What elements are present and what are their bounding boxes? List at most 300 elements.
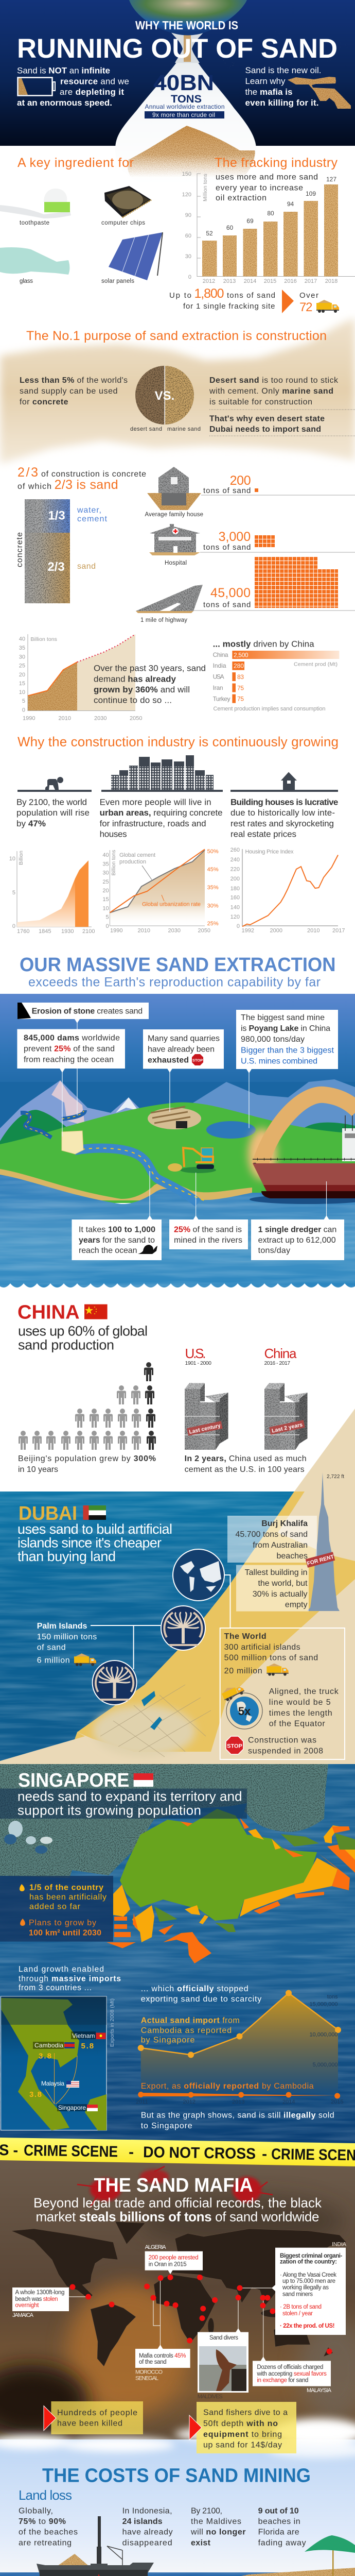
- line chart: cement and urbanization: 45%: [207, 867, 219, 873]
- text block: cement: cement as the U.S. in 100 years: [185, 1465, 305, 1474]
- panel: Singapore: [0, 1764, 355, 2145]
- map inset: sand exporters: 3.8: [29, 2090, 42, 2099]
- line chart: cement and urbanization: 5: [105, 914, 109, 921]
- text block: depleting: at an enormous speed.: [17, 98, 112, 108]
- illustration: dredging cross-section: [0, 2516, 355, 2576]
- illustration: excavator: [168, 1148, 216, 1173]
- area chart: world population: 0: [12, 923, 15, 929]
- bar chart: fracking sand: 2015: [264, 278, 276, 284]
- text block: artificial islands: islands since it's cheaper: [17, 1535, 162, 1551]
- area chart: sand demand: 40: [19, 636, 25, 642]
- callout: The World: 20 million: [224, 1667, 262, 1675]
- icon: sand comparison: desert sand: [130, 426, 162, 432]
- text block: urban areas: [100, 798, 223, 839]
- heading: [5, 1296, 108, 1327]
- icon: US cement blocks: [185, 1383, 228, 1450]
- line chart: housing price index: 160: [230, 894, 240, 901]
- callout: quarries: [143, 1029, 224, 1073]
- bar chart: fracking sand: 2016: [284, 278, 297, 284]
- callout: dams: prevent 25% of the sand: [24, 1044, 115, 1053]
- panel: sand mafia: [0, 2138, 355, 2447]
- text block: beaches: [19, 2507, 78, 2547]
- area chart: sand demand: 30: [19, 654, 25, 660]
- text block: beaches: of the beaches: [19, 2528, 78, 2537]
- chart: concrete composition: cement: [77, 515, 108, 523]
- label: solar panels: [101, 278, 134, 284]
- bar chart: fracking sand: 0: [188, 274, 191, 280]
- callout: Jamaica: [12, 2287, 69, 2318]
- area chart: sand imports: by Singapore: [141, 2036, 194, 2045]
- callout: officials: Dozens of officials charged: [257, 2364, 323, 2370]
- text block: 60 percent: sand production: [18, 1337, 114, 1353]
- callout: The World: 5x: [238, 1705, 251, 1718]
- line chart: cement and urbanization: 20: [102, 888, 109, 894]
- callout: slow travel: years for the sand to: [79, 1236, 155, 1245]
- callout: The World: The World: [224, 1632, 267, 1641]
- bar chart: fracking sand: 2013: [223, 278, 236, 284]
- icon: crawling baby: [17, 777, 92, 792]
- text block: fracking: uses more and more sand: [216, 173, 318, 181]
- bar chart: fracking sand: 60: [226, 224, 233, 231]
- text block: fracking: oil extraction: [216, 194, 267, 202]
- map: surrounding land: [0, 1764, 328, 1878]
- text block: lucrative: [230, 798, 338, 839]
- blood splatter: [77, 2166, 273, 2208]
- icon: glass bottle: [0, 247, 70, 275]
- callout: dams: [17, 1029, 125, 1073]
- callout: slow travel: It takes 100 to 1,000: [79, 1225, 155, 1234]
- text block: new oil: Learn why: [245, 76, 286, 86]
- callout: The World: of the Equator: [269, 1720, 325, 1728]
- background: night sky: [0, 0, 355, 146]
- text block: depleting: Sand is NOT an infinite: [17, 66, 110, 75]
- text block: imports: Land growth enabled: [19, 1965, 104, 1974]
- heading: OUR MASSIVE SAND EXTRACTION: [20, 954, 335, 976]
- text block: population: [16, 798, 90, 828]
- text block: concrete supply: Less than 5% of the world's: [20, 376, 128, 385]
- line chart: cement and urbanization: 1990: [110, 928, 122, 934]
- callout: sand divers: [198, 2328, 248, 2400]
- bar chart: fracking sand: 2014: [244, 278, 256, 284]
- bar chart: fracking sand: 120: [182, 192, 191, 198]
- chart: concrete composition: 1/3: [48, 509, 65, 522]
- text block: Maldives: By 2100,: [191, 2507, 222, 2516]
- bar chart: cement production: China: [213, 651, 228, 658]
- area chart: sand imports: Actual sand import from: [141, 2016, 240, 2025]
- area chart: world population: Billion: [18, 851, 24, 865]
- callout: 1,800 tons: [169, 286, 275, 311]
- area chart: sand imports: 2015: [331, 2099, 343, 2105]
- label: toothpaste: [20, 220, 49, 226]
- bar chart: cement production: 75: [237, 696, 244, 703]
- crime scene tape: DO NOT CROSS: [143, 2144, 256, 2162]
- line chart: cement and urbanization: 25%: [207, 921, 219, 927]
- icon: toothpaste: [0, 189, 71, 218]
- bar chart: cement production: [213, 639, 339, 712]
- bar chart: fracking sand: [182, 171, 355, 284]
- text block: Indonesia: disappeared: [122, 2538, 172, 2547]
- background: sand band: [0, 318, 355, 464]
- text block: urban areas: houses: [100, 829, 127, 839]
- line chart: housing price index: 2010: [307, 928, 319, 934]
- callout: Burj Khalifa: Burj Khalifa: [261, 1519, 308, 1528]
- text block: demand: continue to do so ...: [94, 696, 172, 705]
- callout: 1,800 tons: for 1 single fracking site: [183, 302, 275, 311]
- illustration: mountain river: [21, 1110, 85, 1138]
- labels: US vs China: 2016 - 2017: [264, 1360, 290, 1366]
- text block: officially stopped: ... which officially stopped: [141, 1985, 248, 1993]
- text block: depleting: resource and we: [60, 76, 129, 87]
- area chart: sand imports: Export, as officially reported by Cambodia: [141, 2082, 314, 2091]
- area chart: sand demand: 2050: [130, 715, 142, 721]
- callout: Algeria: ALGERIA: [145, 2244, 166, 2250]
- area chart: world population: 1930: [61, 928, 74, 935]
- area chart: world population: [9, 851, 95, 935]
- callout: river mining: 25% of the sand is: [174, 1225, 242, 1234]
- line chart: cement and urbanization: production: [119, 859, 146, 865]
- stat: 72 trucks: [299, 291, 339, 314]
- callout: biggest mine: [236, 1010, 338, 1073]
- area chart: world population: 1845: [39, 928, 51, 935]
- area chart: sand demand: 25: [19, 663, 25, 669]
- stat: 40BN tons: 40BN: [153, 71, 214, 95]
- callout: India: INDIA: [332, 2242, 347, 2248]
- text block: Maldives: [190, 2507, 246, 2547]
- text block: black market: [33, 2195, 322, 2225]
- title: RUNNING OUT OF SAND: [17, 33, 338, 64]
- stat: 45,000 tons: [203, 557, 338, 609]
- chart: concrete composition: concrete: [15, 532, 24, 567]
- heading: THE SAND MAFIA: [94, 2175, 253, 2196]
- callout: officials: [253, 2357, 332, 2394]
- icon: hourglass with earth: [115, 0, 256, 187]
- callout: killed: Hundreds of people: [57, 2409, 137, 2417]
- callout: killed: have been killed: [57, 2419, 122, 2428]
- stat: 200 tons: 200: [230, 473, 251, 488]
- text block: imports: through massive imports: [19, 1975, 121, 1984]
- bar chart: cement production: 75: [237, 684, 244, 691]
- line chart: cement and urbanization: 25: [102, 879, 109, 885]
- line chart: housing price index: 240: [230, 857, 240, 863]
- callout lines: [62, 1022, 326, 1217]
- text block: 60 percent: [18, 1324, 148, 1353]
- callout: river mining: [169, 1215, 248, 1249]
- callout: dredger: tons/day: [258, 1246, 290, 1255]
- text block: two thirds: 2/3: [17, 465, 38, 480]
- callout: Jamaica: A whole 1300ft-long: [15, 2290, 65, 2296]
- callout: 1,800 tons: Up to: [169, 291, 191, 300]
- area chart: sand demand: 5: [22, 698, 25, 704]
- callout: dams: 845,000 dams worldwide: [24, 1033, 120, 1042]
- bar chart: cement production: Cement production implies sand consumption: [213, 706, 325, 712]
- area chart: world population: 5: [12, 890, 15, 896]
- text block: cement: In 2 years, China used as much: [185, 1454, 307, 1463]
- callout: dredger: extract up to 612,000: [258, 1236, 336, 1245]
- background: gulf: [0, 1492, 355, 1764]
- callout: India: Biggest criminal organi-: [280, 2253, 343, 2259]
- stat: 40BN tons: TONS: [171, 93, 202, 105]
- area chart: sand demand: Billion tons: [30, 636, 57, 642]
- area chart: sand demand: [19, 634, 142, 721]
- callout: erosion: [17, 1003, 149, 1023]
- line chart: housing price index: 200: [230, 876, 240, 882]
- callout: India: · Along the Vasai Creek: [280, 2272, 336, 2278]
- icon: computer chip: [104, 186, 151, 217]
- heading: [18, 1770, 153, 1803]
- text block: depleting: are depleting it: [60, 87, 124, 97]
- line chart: housing price index: 140: [230, 904, 240, 910]
- text block: Palm Islands: [37, 1622, 97, 1666]
- area chart: sand imports: 2014: [282, 2099, 295, 2105]
- bar chart: cement production: Cement prod (Mt): [294, 662, 338, 668]
- heading: [5, 946, 340, 990]
- bar chart: fracking sand: 127: [326, 176, 336, 183]
- text block: Palm Islands: 150 million tons: [37, 1633, 97, 1641]
- callout: erosion: Erosion of stone creates sand: [32, 1007, 143, 1016]
- line chart: housing price index: 220: [230, 867, 240, 873]
- map inset: Palm Jumeirah: [161, 1606, 205, 1650]
- stat: 3,000 tons: 3,000: [219, 530, 251, 544]
- bar chart: fracking sand: 94: [287, 200, 294, 208]
- area chart: sand demand: 1990: [23, 715, 35, 721]
- heading: Why the construction industry is continuously growing: [17, 734, 339, 750]
- callout: biggest mine: The biggest sand mine: [241, 1013, 325, 1022]
- illustration: hills: [0, 1103, 355, 1203]
- callout: officials: with accepting sexual favors: [256, 2371, 327, 2377]
- callout: sand divers: Sand divers: [209, 2335, 238, 2341]
- text block: lucrative: due to historically low inte-: [230, 808, 335, 818]
- text block: artificial islands: [17, 1521, 172, 1564]
- callout: India: stolen / year: [282, 2311, 313, 2317]
- line chart: housing price index: 260: [230, 847, 240, 853]
- background stars: [0, 0, 355, 146]
- bar chart: fracking sand: 150: [182, 171, 191, 177]
- text block: desert sand: That's why even desert state: [209, 414, 325, 423]
- line chart: cement and urbanization: 2010: [138, 928, 150, 934]
- stat: 40BN tons: 9x more than crude oil: [152, 111, 215, 118]
- callout: officials: MALAYSIA: [307, 2387, 332, 2394]
- area chart: world population: 10: [9, 856, 15, 862]
- text block: Indonesia: 24 islands: [122, 2517, 163, 2526]
- arrow: [282, 290, 294, 313]
- labels: US vs China: U.S.: [185, 1346, 206, 1361]
- text block: fracking: [216, 173, 318, 202]
- callout: India: up to 75.000 men are: [282, 2278, 335, 2284]
- text block: two thirds: of which: [17, 482, 51, 491]
- illustration: lake: [206, 1121, 256, 1139]
- stat: 72 trucks: Over: [299, 291, 318, 300]
- callout: The World: line would be 5: [269, 1698, 331, 1707]
- text block: Florida: Florida are: [258, 2528, 299, 2537]
- callout: Jamaica: JAMAICA: [12, 2312, 34, 2318]
- callout: reclaimed land: added so far: [29, 1903, 81, 1911]
- callout: sand fishers: [189, 2402, 296, 2453]
- line chart: housing price index: 2000: [270, 928, 282, 934]
- map inset: Palm Jebel Ali: [93, 1660, 137, 1705]
- text block: beaches: 75% to 90%: [19, 2517, 66, 2526]
- text block: Palm Islands: 6 million: [37, 1656, 70, 1665]
- text block: imports: from 3 countries ...: [19, 1984, 92, 1992]
- bar chart: fracking sand: 80: [267, 210, 274, 217]
- bar chart: cement production: USA: [213, 673, 224, 681]
- area chart: world population: 1760: [17, 928, 29, 935]
- callout: Morocco and Senegal: of the sand: [139, 2359, 167, 2365]
- icon: empty battery: [17, 77, 55, 96]
- background: clouds: [0, 2418, 355, 2458]
- connector lines: [91, 1575, 230, 1669]
- callout: quarries: exhausted: [148, 1056, 189, 1065]
- icon: family house: [147, 467, 201, 510]
- illustration: mountains: [0, 1079, 355, 1151]
- callout: The World: times the length: [269, 1709, 332, 1718]
- text block: officially stopped: exporting sand due to scarcity: [141, 1995, 261, 2004]
- line chart: cement and urbanization: 2050: [198, 928, 210, 934]
- bar chart: fracking sand: 69: [246, 217, 254, 225]
- callout: Jamaica: overnight: [15, 2302, 39, 2309]
- area chart: sand imports: 2012: [183, 2099, 196, 2105]
- text block: 60 percent: uses up 60% of global: [18, 1324, 148, 1339]
- callout: The World: 300 artificial islands: [224, 1643, 300, 1652]
- text block: two thirds: 2/3 is sand: [55, 478, 118, 492]
- stat: 3,000 tons: [200, 530, 355, 552]
- heading: DUBAI: [19, 1503, 77, 1524]
- area chart: sand imports: tons: [327, 1994, 338, 2000]
- text block: desert sand: is suitable for construction: [209, 398, 312, 406]
- text block: lucrative: Building houses is lucrative: [230, 798, 338, 807]
- background: dust storm: [0, 2159, 355, 2447]
- map inset: sand exporters: Singapore: [58, 2104, 86, 2111]
- callout: Morocco and Senegal: [135, 2345, 190, 2381]
- bar chart: cement production: 280: [234, 663, 244, 670]
- wave edge: [0, 1283, 355, 1293]
- line chart: cement and urbanization: 10: [102, 906, 109, 912]
- stat: 45,000 tons: 45,000: [210, 586, 251, 600]
- title: [17, 19, 352, 72]
- text block: depleting: [17, 66, 129, 108]
- text block: illegally sold: But as the graph shows, sand is still illegally sold: [141, 2111, 334, 2120]
- callout: reclaimed land: 1/5 of the country: [29, 1884, 103, 1892]
- line chart: cement and urbanization: 40: [102, 852, 109, 858]
- map inset: The World islands: [173, 1549, 224, 1601]
- callout: biggest mine: is Poyang Lake in China: [241, 1024, 330, 1033]
- panel: why construction grows: [9, 734, 345, 935]
- line chart: housing price index: 2017: [332, 928, 345, 934]
- icon: house: [230, 772, 338, 792]
- callout: The World: suspended in 2008: [248, 1747, 323, 1756]
- text block: artificial islands: uses sand to build artificial: [17, 1521, 172, 1537]
- text block: Beijing: in 10 years: [18, 1465, 58, 1474]
- callout: dredger: 1 single dredger can: [258, 1225, 336, 1234]
- bar chart: fracking sand: 109: [306, 190, 316, 197]
- line chart: cement and urbanization: 35: [102, 861, 109, 868]
- illustration: quarry: [148, 1107, 201, 1129]
- map markers: [70, 2275, 332, 2354]
- line chart: housing price index: [230, 847, 345, 934]
- bar chart: cement production: India: [213, 662, 226, 669]
- text block: Maldives: exist: [191, 2538, 211, 2547]
- label: 1 mile of highway: [140, 617, 187, 623]
- subheading: Land loss: [19, 2487, 72, 2503]
- line chart: cement and urbanization: 35%: [207, 885, 219, 891]
- callout: quarries: Many sand quarries: [148, 1035, 220, 1043]
- panel: key ingredient: [0, 156, 355, 314]
- stat: 72 trucks: 72: [299, 300, 313, 314]
- text block: concrete supply: sand supply can be used: [20, 387, 117, 396]
- crime scene tape: -: [129, 2144, 134, 2161]
- bar chart: fracking sand: 2012: [203, 278, 215, 284]
- area chart: sand imports: 2011: [136, 2099, 148, 2105]
- text block: imports: [19, 1965, 121, 1992]
- bar chart: fracking sand: 2017: [305, 278, 317, 284]
- line chart: housing price index: 0: [237, 923, 240, 929]
- background: sea: [0, 1764, 355, 2145]
- line chart: cement and urbanization: 2030: [168, 928, 181, 934]
- callout: Burj Khalifa: from Australian: [253, 1541, 308, 1550]
- icon: hospital: [149, 524, 200, 555]
- line chart: cement and urbanization: 15: [102, 896, 109, 903]
- callout: sand fishers: equipment to bring: [203, 2430, 282, 2439]
- text block: Beijing: Beijing's population grew by 300%: [18, 1454, 156, 1463]
- callout: Algeria: [145, 2244, 203, 2274]
- text block: artificial islands: than buying land: [17, 1549, 116, 1564]
- line chart: cement and urbanization: [102, 849, 219, 934]
- callout: empty tower: 30% is actually: [253, 1590, 308, 1599]
- text block: Florida: beaches in: [258, 2517, 300, 2526]
- callout: 1,800 tons: tons of sand: [227, 291, 275, 300]
- text block: Indonesia: [122, 2507, 173, 2547]
- label: Exports in 2008 (Mt): [109, 1998, 115, 2047]
- illustration: dam: [62, 1131, 83, 1154]
- text block: urban areas: urban areas, requiring concrete: [100, 808, 223, 818]
- text block: cement: [185, 1454, 307, 1474]
- line chart: cement and urbanization: 30: [102, 870, 109, 876]
- callout: India: [272, 2242, 347, 2335]
- text block: officially stopped: [141, 1985, 261, 2004]
- text block: Indonesia: In Indonesia,: [122, 2507, 172, 2516]
- text block: Maldives: will no longer: [190, 2528, 246, 2537]
- icon: sand comparison: marine sand: [167, 426, 201, 432]
- heading: exceeds the Earth's reproduction capability by far: [28, 975, 321, 990]
- text block: two thirds: [17, 465, 146, 492]
- callout: dams: from reaching the ocean: [24, 1055, 114, 1064]
- callout: slow travel: [72, 1215, 162, 1260]
- area chart: sand demand: 2030: [94, 715, 106, 721]
- text block: urban areas: Even more people will live in: [100, 798, 211, 807]
- callout: killed: [44, 2401, 143, 2434]
- callout: Algeria: in Oran in 2015: [149, 2262, 187, 2268]
- area chart: sand imports: 10,000,000: [309, 2032, 338, 2038]
- icon: city skyline: [101, 755, 223, 792]
- label: for rent: FOR RENT: [306, 1554, 335, 1567]
- stat: 45,000 tons: tons of sand: [203, 601, 251, 609]
- area chart: sand imports: Cambodia as reported: [141, 2026, 232, 2035]
- line chart: cement and urbanization: Global cement: [119, 852, 155, 858]
- area chart: sand imports: 15,000,000: [309, 2002, 338, 2008]
- callout: The World: Construction was: [248, 1736, 316, 1744]
- bar chart: cement production: ... mostly driven by China: [213, 639, 314, 649]
- text block: Palm Islands: Palm Islands: [37, 1622, 87, 1631]
- callout: quarries: have already been: [148, 1045, 215, 1054]
- callout: India: · 22x the prod. of US!: [280, 2323, 334, 2329]
- heading: CHINA: [17, 1301, 80, 1323]
- band: dark title strip: [0, 1789, 247, 1819]
- heading: SINGAPORE: [18, 1770, 130, 1791]
- text block: population: by 47%: [16, 819, 46, 828]
- callout: reclaimed land: 100 km² until 2030: [29, 1928, 101, 1937]
- callout: empty tower: empty: [285, 1600, 308, 1609]
- callout: Morocco and Senegal: Mafia controls 45%: [139, 2353, 186, 2359]
- text block: Maldives: the Maldives: [191, 2517, 241, 2526]
